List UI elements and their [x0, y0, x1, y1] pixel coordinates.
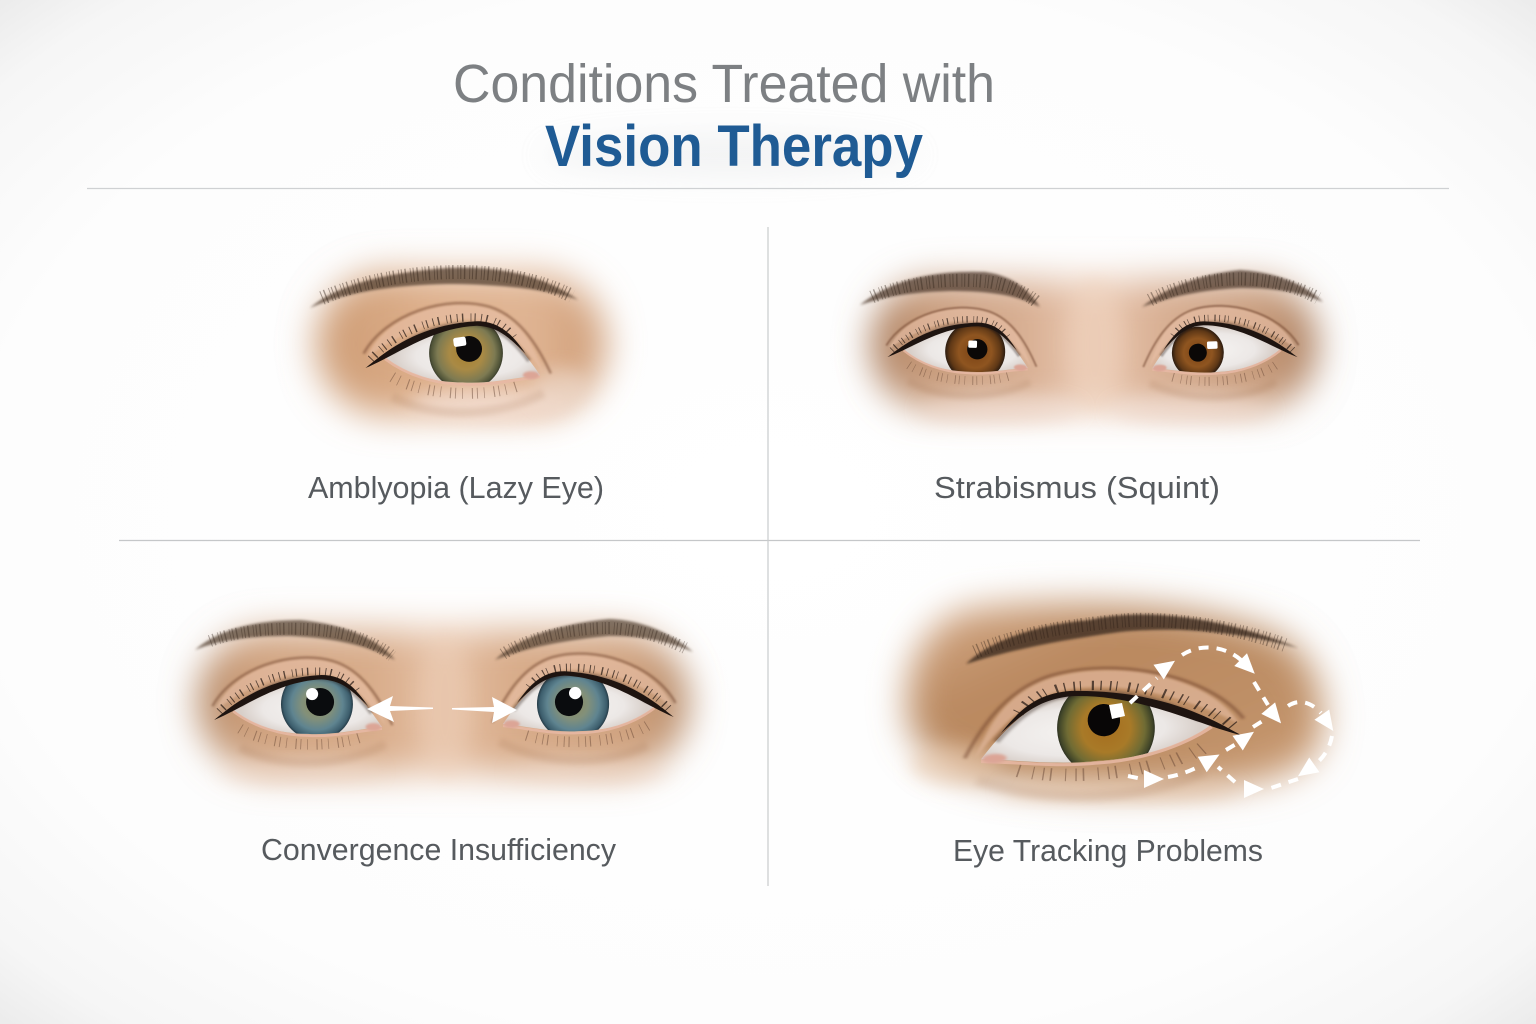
- tracking path: dashed arrows: [1128, 648, 1341, 798]
- panel: amblyopia: [308, 268, 606, 505]
- label: Convergence Insufficiency: [261, 832, 616, 867]
- eye photo: large hazel eye: [907, 603, 1341, 804]
- title line 2: Vision Therapy: [545, 114, 923, 179]
- eye photo: single hazel eye: [310, 268, 606, 421]
- arrow: pointing right: [452, 697, 517, 723]
- arrow: pointing left: [367, 696, 433, 722]
- label: Eye Tracking Problems: [953, 833, 1263, 868]
- eye photo: blue-grey eyes: [195, 619, 693, 782]
- panel: eye tracking problems: [907, 603, 1341, 868]
- label: Strabismus (Squint): [934, 470, 1220, 505]
- panel: convergence insufficiency: [195, 619, 693, 867]
- title line 1: Conditions Treated with: [453, 54, 995, 114]
- title block: [453, 54, 995, 179]
- panel: strabismus: [860, 270, 1323, 505]
- highlight: [1109, 703, 1125, 719]
- label: Amblyopia (Lazy Eye): [308, 470, 604, 505]
- title shadow: [540, 133, 920, 177]
- eye photo: misaligned brown eyes: [860, 270, 1323, 422]
